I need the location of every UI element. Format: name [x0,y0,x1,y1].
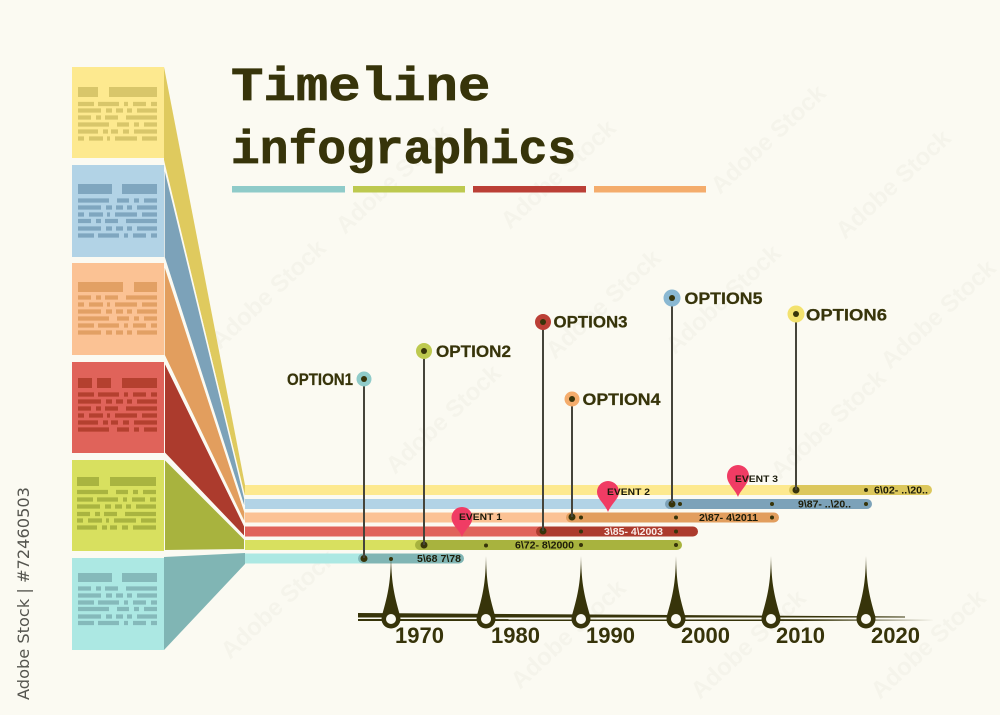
axis tick 2010 [762,556,825,648]
bar: option 6 period [789,485,932,496]
bar: option 2 period [415,540,682,552]
event 3 pin: EVENT 3 [735,474,778,485]
option 5 marker and label: OPTION5 [684,289,762,308]
text: Adobe Stock [766,364,892,484]
panel: blue text card [72,165,164,257]
bar: option 1 period: 5\68 7\78 [417,554,461,565]
option 1 marker and label: OPTION1 [287,370,353,389]
light timeline bars [245,485,805,564]
text: Adobe Stock [686,584,812,704]
axis tick 1990 [572,556,635,648]
axis tick 1980 [476,556,540,648]
axis tick 2020 [856,556,920,648]
title: infographics [231,124,576,178]
text: Adobe Stock [381,359,507,479]
bar: option 4 period [566,512,779,524]
text: Adobe Stock [206,234,332,354]
text: Adobe Stock [506,574,632,694]
axis tick 2000 [666,556,730,648]
text: Adobe Stock [831,124,957,244]
axis tick 1970: 1970 [395,623,444,648]
title: Timeline [231,62,490,115]
side faces: funnel from panels into timeline bars [164,67,245,650]
event 1 pin: EVENT 1 [459,512,503,523]
panel: green text card [72,460,164,551]
event 2 pin [597,481,650,512]
option 6 marker and label: OPTION6 [806,306,887,324]
bar: option 2 period: 6\72- 8\2000 [515,540,574,552]
bar: option 3 period: 3\85- 4\2003 [604,527,663,538]
panel: cyan text card [72,558,164,650]
text: Adobe Stock [706,79,832,199]
axis tick 1990: 1990 [586,623,635,648]
vertical option stems [364,298,796,558]
event 2 pin: EVENT 2 [607,487,650,498]
text: Adobe Stock [541,244,667,364]
time axis double line [358,613,935,621]
event 3 pin [727,465,778,497]
panel: yellow text card [72,67,164,158]
bar: option 1 period [358,554,464,565]
bar: option 5 period [665,499,872,510]
axis tick 1980: 1980 [491,623,540,648]
axis tick 2020: 2020 [871,623,920,648]
panel: red text card [72,362,164,453]
panel: orange text card [72,263,164,355]
text: Adobe Stock [661,239,787,359]
bar: option 5 period: 9\87- ..\20.. [798,500,851,510]
bar: option 6 period: 6\02- ..\20.. [874,486,928,496]
bar: option 3 period [536,526,698,538]
option 2 marker and label: OPTION2 [436,342,511,361]
axis tick 2010: 2010 [776,623,825,648]
bar: option 4 period: 2\87- 4\2011 [699,513,758,524]
option 4 marker and label: OPTION4 [582,390,661,409]
event 1 pin [452,507,503,537]
stock credit text: Adobe Stock | #72460503 [14,487,33,700]
text: Adobe Stock [866,584,992,704]
text: Adobe Stock [876,254,1000,374]
text: Adobe Stock [496,114,622,234]
axis tick 2000: 2000 [681,623,730,648]
text: Adobe Stock [216,544,342,664]
option 3 marker and label: OPTION3 [554,312,628,332]
title [231,62,576,178]
title colour underline bars [232,186,706,192]
text: Adobe Stock [331,119,457,239]
axis tick 1970 [382,556,444,648]
